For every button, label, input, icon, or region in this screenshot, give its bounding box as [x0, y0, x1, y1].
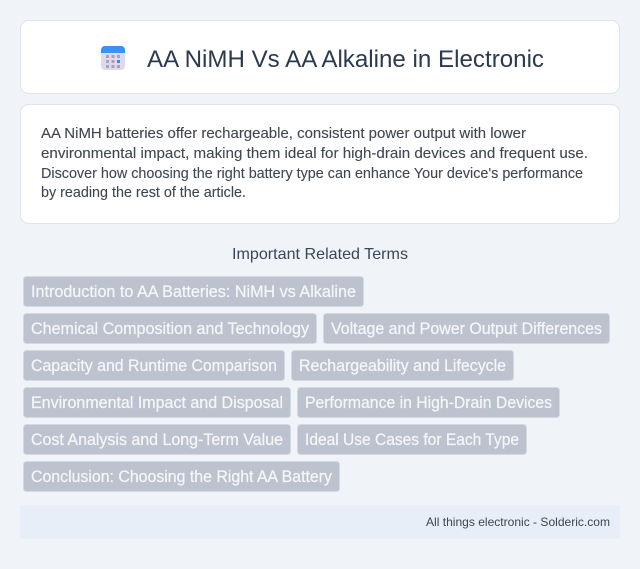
panel: description: by reading the rest of the article. [41, 185, 246, 201]
tag: introduction: Introduction to AA Batteries: NiMH vs Alkaline [31, 283, 356, 301]
tag: introduction [24, 276, 364, 306]
tag: environmental impact [24, 388, 290, 418]
tag: capacity [24, 350, 284, 380]
header panel [20, 20, 620, 94]
icon: calendar grid [101, 46, 125, 70]
heading: important related terms: Important Related Terms [232, 246, 408, 263]
footer bar [20, 505, 620, 539]
tag: conclusion [24, 462, 340, 492]
panel: description: AA NiMH batteries offer rechargeable, consistent power output with lower [41, 126, 526, 142]
panel: description: environmental impact, making them ideal for high-drain devices and frequent use. [41, 146, 588, 162]
panel: description: Discover how choosing the right battery type can enhance Your device's performance [41, 166, 583, 182]
title: AA NiMH Vs AA Alkaline in Electronic [147, 46, 544, 73]
tag: voltage: Voltage and Power Output Differences [331, 320, 602, 338]
tag: chemical composition [24, 314, 316, 344]
tag: voltage [324, 314, 610, 344]
tag: high-drain performance: Performance in High-Drain Devices [305, 394, 552, 412]
tag: conclusion: Conclusion: Choosing the Right AA Battery [31, 468, 333, 486]
tag: cost analysis [24, 424, 290, 454]
tag: cost analysis: Cost Analysis and Long-Term Value [31, 431, 283, 449]
panel: description [20, 104, 620, 224]
tag: rechargeability: Rechargeability and Lifecycle [299, 357, 506, 375]
footer credit: All things electronic - Solderic.com [426, 515, 610, 529]
tag: capacity: Capacity and Runtime Comparison [31, 357, 277, 375]
tag: high-drain performance [298, 388, 560, 418]
tag: ideal use cases [298, 424, 526, 454]
tag: chemical composition: Chemical Composition and Technology [31, 320, 310, 338]
related terms tags [24, 276, 610, 492]
tag: rechargeability [292, 350, 514, 380]
tag: environmental impact: Environmental Impact and Disposal [31, 394, 283, 412]
tag: ideal use cases: Ideal Use Cases for Each Type [305, 431, 519, 449]
